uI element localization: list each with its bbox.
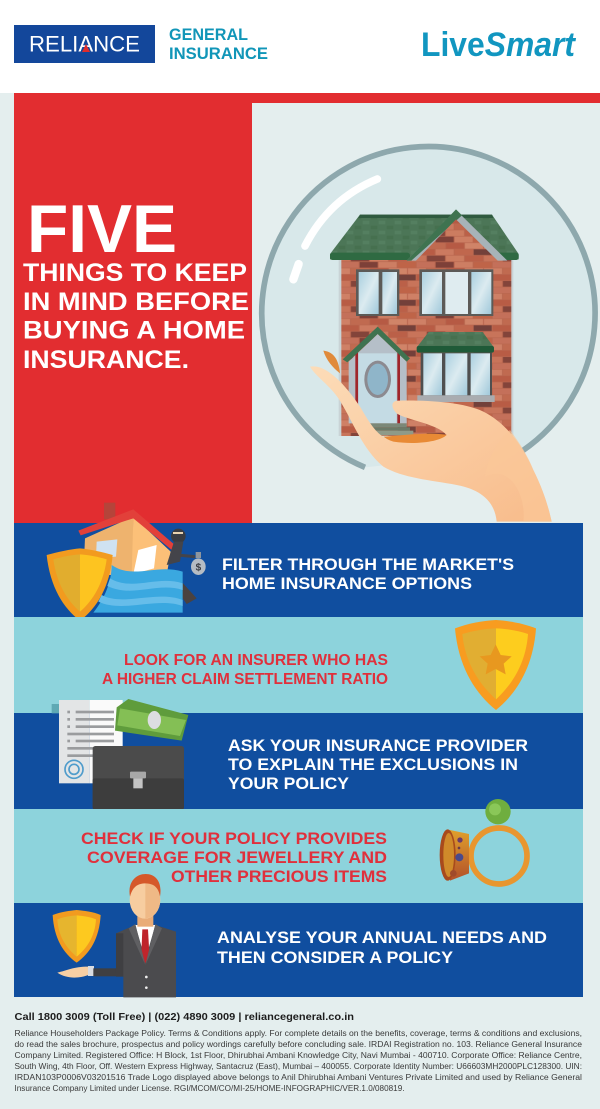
band 2 [14, 617, 583, 713]
bubble [262, 147, 595, 467]
heading: subtitle: IN MIND BEFORE [23, 288, 249, 316]
footer legal text: Reliance Householders Package Policy. Terms & Conditions apply. For complete details on the benefits, coverage, terms & conditions and exclusions, [14, 1029, 582, 1038]
logo: Reliance: RELIANCE [29, 32, 140, 56]
icon: flooded house, thief, shield [47, 503, 206, 621]
text: exclusions: TO EXPLAIN THE EXCLUSIONS IN [228, 756, 518, 774]
text: filter [222, 556, 514, 593]
waves [93, 565, 183, 613]
band 1 [14, 503, 583, 621]
text: annual needs: ANALYSE YOUR ANNUAL NEEDS AND [217, 928, 547, 947]
text: filter: HOME INSURANCE OPTIONS [222, 575, 472, 593]
text: jewellery: OTHER PRECIOUS ITEMS [171, 868, 387, 886]
band 4 [14, 799, 583, 903]
shield [53, 910, 101, 963]
heading: subtitle: BUYING A HOME [23, 316, 245, 344]
bubble highlights [305, 179, 377, 246]
icon: document, money, briefcase [52, 699, 188, 809]
heading: five: FIVE [27, 191, 177, 267]
text: insurer: A HIGHER CLAIM SETTLEMENT RATIO [102, 671, 388, 688]
gable [407, 210, 507, 261]
footer contact line: Call 1800 3009 (Toll Free) | (022) 4890 3009 | reliancegeneral.co.in [14, 1012, 354, 1023]
hand [310, 351, 552, 522]
footer legal text: South Wing, 4th Floor, Off. Western Express Highway, Santacruz (East), Mumbai – 400055. Corporate Identity Number: U66603MH2000PLC128300. UIN: [14, 1062, 582, 1071]
band 5 [14, 874, 583, 997]
bay window [421, 353, 492, 396]
heading: subtitle: THINGS TO KEEP [23, 259, 247, 287]
heading: subtitle: INSURANCE. [23, 346, 189, 374]
roof [330, 215, 519, 259]
upper windows [356, 269, 399, 316]
header [0, 0, 600, 93]
red top bar [14, 93, 600, 103]
icon: ring and bangle [440, 799, 527, 884]
text: annual needs [217, 928, 547, 967]
icon: thief: $ [196, 563, 202, 574]
icon: thief [167, 529, 206, 604]
bay window roof [417, 332, 493, 347]
panel: title red [14, 93, 252, 523]
icon: man holding shield [53, 874, 176, 997]
text: jewellery: COVERAGE FOR JEWELLERY AND [87, 849, 387, 867]
text: jewellery [81, 830, 387, 886]
text: annual needs: THEN CONSIDER A POLICY [217, 948, 454, 967]
porch [349, 334, 407, 423]
logo: Reliance [14, 25, 155, 63]
heading: subtitle [23, 259, 249, 374]
band 3 [14, 699, 583, 809]
icon: star shield [455, 620, 536, 710]
logo text: General Insurance: INSURANCE [169, 44, 268, 63]
logo: LiveSmart: LiveSmart [421, 26, 577, 64]
text: jewellery: CHECK IF YOUR POLICY PROVIDES [81, 830, 387, 848]
text: exclusions [228, 737, 528, 793]
logo text: General Insurance [169, 25, 268, 63]
footer legal text [14, 1029, 583, 1093]
text: filter: FILTER THROUGH THE MARKET'S [222, 556, 514, 574]
text: insurer [102, 652, 388, 688]
footer legal text: Company Limited. Registered Office: H Block, 1st Floor, Dhirubhai Ambani Knowledge City, Navi Mumbai - 400710. Corporate Office: Reliance Centre, [14, 1051, 582, 1060]
text: insurer: LOOK FOR AN INSURER WHO HAS [124, 652, 388, 669]
steps [367, 423, 407, 427]
shield [47, 548, 113, 621]
house [330, 209, 519, 436]
text: exclusions: ASK YOUR INSURANCE PROVIDER [228, 737, 528, 755]
man [57, 967, 88, 978]
footer legal text: IRDAN103P0006V03201516 Trade Logo displayed above belongs to Anil Dhirubhai Ambani Ventures Private Limited and used by Reliance General [14, 1073, 582, 1082]
illustration: house in bubble held by hand [262, 147, 595, 522]
logo text: General Insurance: GENERAL [169, 25, 248, 44]
footer legal text: Insurance Company Limited under License. RGI/MCOM/CO/MI-25/HOME-INFOGRAPHIC/VER.1.0/080819. [14, 1084, 404, 1093]
text: exclusions: YOUR POLICY [228, 775, 349, 793]
footer legal text: do read the sales brochure, prospectus and policy wordings carefully before concluding sale. IRDAI Registration no. 103. Reliance General Insurance [14, 1040, 583, 1049]
